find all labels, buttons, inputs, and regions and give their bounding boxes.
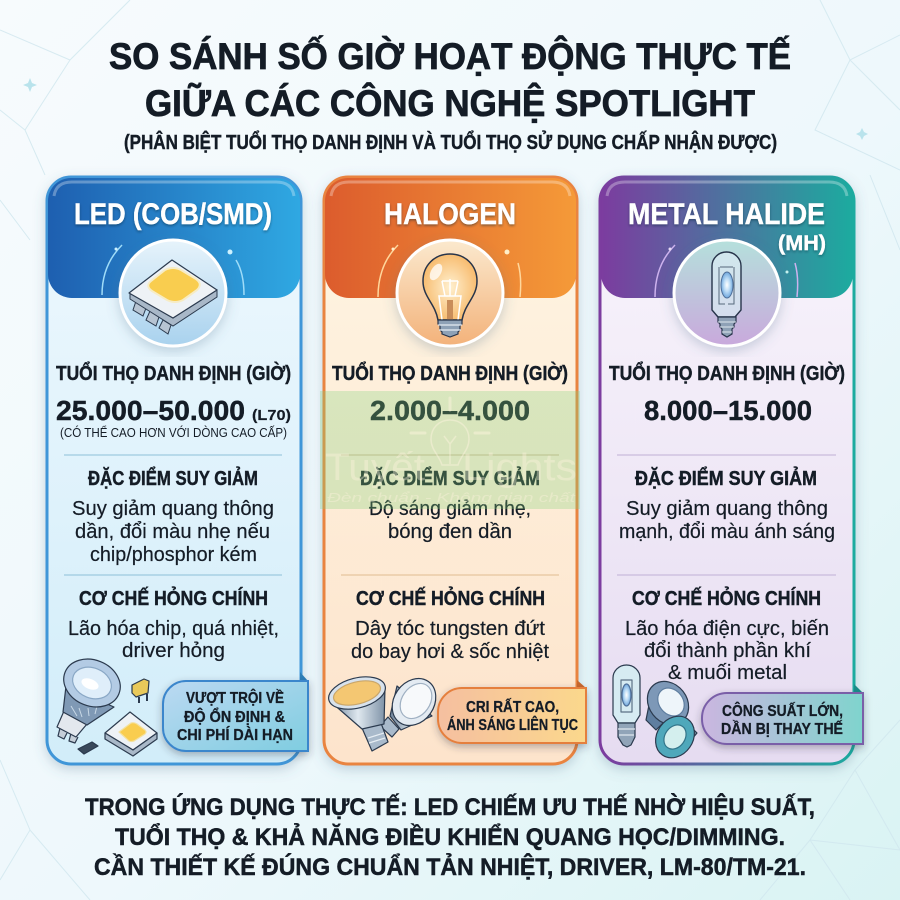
watermark: Tuyết xyxy=(325,447,425,489)
heading: Metal Halide: METAL HALIDE xyxy=(628,198,825,231)
text: degradation xyxy=(369,498,531,543)
label: rated life: TUỔI THỌ DANH ĐỊNH (GIỜ) xyxy=(56,361,291,385)
text: degradation: chip/phosphor kém xyxy=(90,544,257,566)
header: LED xyxy=(48,178,300,298)
text: degradation xyxy=(619,498,835,543)
callout: CÔNG SUẤT LỚN, xyxy=(722,702,843,720)
note: (CÓ THỂ CAO HƠN VỚI DÒNG CAO CẤP) xyxy=(60,425,287,440)
label: failure: CƠ CHẾ HỎNG CHÍNH xyxy=(356,586,545,610)
watermark: Đèn chuẩn - Không gian chất xyxy=(327,490,577,505)
callout: DẦN BỊ THAY THẾ xyxy=(721,721,843,738)
footer conclusion: TUỔI THỌ & KHẢ NĂNG ĐIỀU KHIỂN QUANG HỌC/DIMMING. xyxy=(115,822,785,851)
footer conclusion: TRONG ỨNG DỤNG THỰC TẾ: LED CHIẾM ƯU THẾ NHỜ HIỆU SUẤT, xyxy=(85,793,815,821)
text: failure: driver hỏng xyxy=(122,640,225,662)
text: degradation: Độ sáng giảm nhẹ, xyxy=(369,498,531,520)
text: degradation: dần, đổi màu nhẹ nếu xyxy=(75,521,270,543)
callout xyxy=(163,672,308,751)
panel: LED xyxy=(47,177,308,764)
text: degradation: Suy giảm quang thông xyxy=(626,498,828,520)
panel: Halogen xyxy=(324,177,586,764)
footer conclusion xyxy=(85,793,815,881)
callout: ĐỘ ỔN ĐỊNH & xyxy=(184,708,285,726)
callout: CHI PHÍ DÀI HẠN xyxy=(177,727,293,744)
label: degradation: ĐẶC ĐIỂM SUY GIẢM xyxy=(88,467,258,490)
callout xyxy=(438,680,586,743)
heading: Halogen: HALOGEN xyxy=(384,198,516,231)
callout: ÁNH SÁNG LIÊN TỤC xyxy=(447,716,578,734)
icon: SMD chip xyxy=(120,240,226,346)
callout xyxy=(702,684,863,744)
text: degradation: bóng đen dần xyxy=(388,521,512,543)
icon: metal halide lamps xyxy=(613,665,702,765)
text: failure: đổi thành phần khí xyxy=(644,640,811,662)
text: failure: Dây tóc tungsten đứt xyxy=(355,618,545,640)
text: failure: & muối metal xyxy=(668,662,787,684)
label: rated life: TUỔI THỌ DANH ĐỊNH (GIỜ) xyxy=(609,361,845,385)
label: degradation: ĐẶC ĐIỂM SUY GIẢM xyxy=(635,467,817,490)
text: failure: Lão hóa chip, quá nhiệt, xyxy=(68,618,279,640)
text: failure: Lão hóa điện cực, biến xyxy=(625,618,829,640)
text: failure xyxy=(625,618,829,684)
callout: CRI RẤT CAO, xyxy=(466,699,559,716)
icon: halogen bulb xyxy=(397,240,503,346)
callout: VƯỢT TRỘI VỀ xyxy=(186,689,284,707)
value: rated life: 8.000–15.000 xyxy=(644,395,812,426)
text: failure xyxy=(351,618,549,663)
heading: Metal Halide xyxy=(628,198,826,255)
watermark xyxy=(320,391,580,509)
text: degradation: mạnh, đổi màu ánh sáng xyxy=(619,521,835,543)
title: SO SÁNH SỐ GIỜ HOẠT ĐỘNG THỰC TẾ xyxy=(109,35,791,77)
text: failure xyxy=(68,618,279,662)
text: failure: do bay hơi & sốc nhiệt xyxy=(351,641,549,663)
label: failure: CƠ CHẾ HỎNG CHÍNH xyxy=(79,586,268,610)
title xyxy=(109,35,791,124)
footer conclusion: CẦN THIẾT KẾ ĐÚNG CHUẨN TẢN NHIỆT, DRIVER, LM-80/TM-21. xyxy=(94,852,806,881)
text: degradation: Suy giảm quang thông xyxy=(72,498,274,520)
label: rated life: TUỔI THỌ DANH ĐỊNH (GIỜ) xyxy=(332,361,568,385)
label: failure: CƠ CHẾ HỎNG CHÍNH xyxy=(632,586,821,610)
heading: Metal Halide: (MH) xyxy=(778,232,826,255)
header: Metal Halide xyxy=(601,178,853,298)
icon: halogen lamps xyxy=(325,670,445,751)
title: GIỮA CÁC CÔNG NGHỆ SPOTLIGHT xyxy=(145,82,755,124)
panel: Metal Halide xyxy=(600,177,863,765)
header: Halogen xyxy=(325,178,576,298)
icon: metal halide lamp xyxy=(674,240,780,346)
value: rated life: (L70) xyxy=(252,407,291,424)
watermark: Lights xyxy=(462,447,577,489)
subtitle: (PHÂN BIỆT TUỔI THỌ DANH ĐỊNH VÀ TUỔI THỌ SỬ DỤNG CHẤP NHẬN ĐƯỢC) xyxy=(124,130,777,154)
heading: LED: LED (COB/SMD) xyxy=(74,198,272,231)
text: degradation xyxy=(72,498,274,566)
value: rated life: 2.000–4.000 xyxy=(370,395,530,426)
value: rated life: 25.000–50.000 xyxy=(56,395,245,426)
icon: LED parts xyxy=(56,651,157,756)
label: degradation: ĐẶC ĐIỂM SUY GIẢM xyxy=(360,467,540,490)
